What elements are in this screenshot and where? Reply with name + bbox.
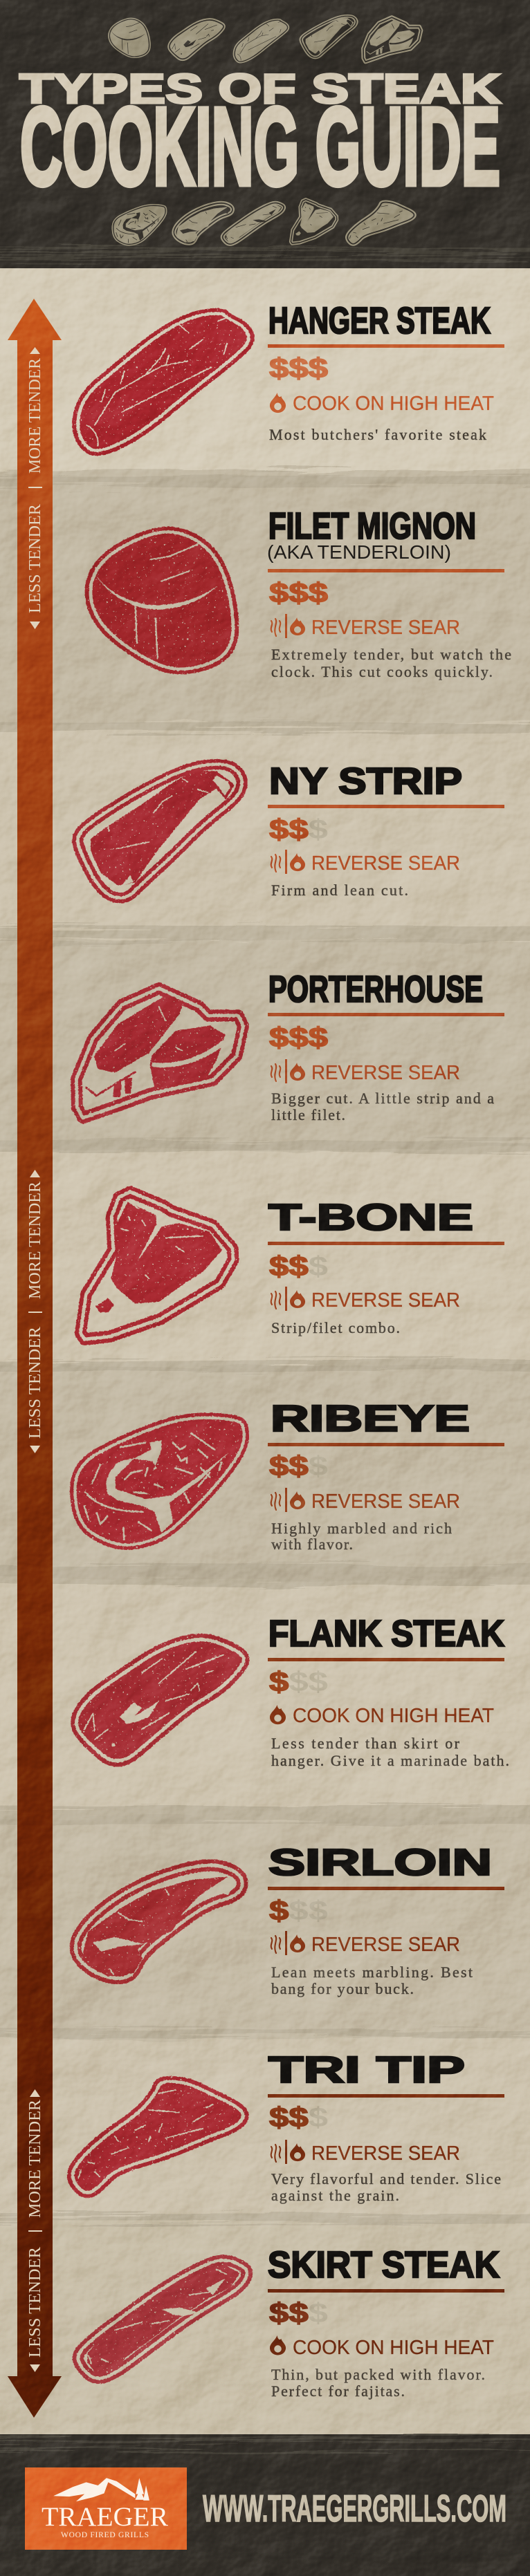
description — [271, 1090, 494, 1123]
description — [271, 1963, 473, 1997]
description: Lean meets marbling. Best — [271, 1963, 473, 1981]
description — [271, 2170, 501, 2204]
heading: NY STRIP — [269, 760, 462, 802]
description — [271, 646, 511, 680]
description: hanger. Give it a marinade bath. — [271, 1752, 509, 1769]
icon: flank steak — [77, 1640, 244, 1761]
divider rule — [268, 569, 504, 572]
text: tenderness labels, middle — [26, 1170, 44, 1453]
description — [271, 1735, 509, 1769]
description: bang for your buck. — [271, 1980, 414, 1997]
cooking method: REVERSE SEAR — [311, 852, 460, 875]
description — [271, 2366, 485, 2400]
price: $$$ — [269, 353, 328, 384]
icon: bottom row of small steaks — [113, 200, 414, 244]
description: Strip/filet combo. — [271, 1319, 400, 1336]
cooking method: REVERSE SEAR — [311, 617, 460, 639]
text: tenderness labels, middle: LESS TENDER — [26, 1327, 44, 1439]
icon: ny strip — [77, 765, 242, 898]
icon: hanger steak — [78, 313, 248, 451]
heading: T-BONE — [268, 1197, 473, 1238]
panel: flank steak — [77, 1613, 509, 1769]
icon: reverse sear — [271, 614, 305, 638]
divider rule — [268, 2289, 504, 2293]
icon: reverse sear — [271, 1059, 305, 1083]
icon: sirloin — [75, 1865, 242, 1979]
panel: hanger steak — [78, 300, 504, 451]
panel: sirloin — [75, 1842, 504, 1997]
icon: reverse sear — [271, 1488, 305, 1512]
price: $$ $ — [269, 1451, 328, 1482]
panel: tri tip — [73, 2049, 504, 2204]
panel: porterhouse — [76, 969, 504, 1123]
cooking method: REVERSE SEAR — [311, 1289, 460, 1312]
logo wordmark: TRAEGER — [42, 2502, 168, 2532]
price: $$$ — [269, 1667, 328, 1697]
description: Perfect for fajitas. — [271, 2382, 405, 2400]
icon: porterhouse — [76, 989, 244, 1118]
price: $$ $ — [269, 2298, 328, 2328]
icon: reverse sear — [271, 1931, 305, 1955]
heading: TRI TIP — [268, 2049, 465, 2091]
description: with flavor. — [271, 1536, 353, 1553]
panel: t-bone — [80, 1192, 504, 1339]
icon: reverse sear — [271, 1287, 305, 1311]
icon: mountains and trees — [53, 2478, 149, 2501]
description: Thin, but packed with flavor. — [271, 2366, 485, 2383]
description: Less tender than skirt or — [271, 1735, 460, 1752]
price: $$ $ — [269, 2102, 328, 2133]
text: tenderness labels, lower — [26, 2089, 44, 2372]
cooking method: REVERSE SEAR — [311, 2143, 460, 2165]
text: tenderness labels, upper: MORE TENDER — [26, 358, 44, 474]
divider rule — [268, 1013, 504, 1016]
text: tenderness labels, lower: LESS TENDER — [26, 2247, 44, 2358]
heading: FILET MIGNON — [268, 505, 476, 547]
cooking method: REVERSE SEAR — [311, 1934, 460, 1956]
icon: flame — [270, 2335, 286, 2355]
subheading: (AKA TENDERLOIN) — [267, 541, 451, 563]
arrow: tenderness scale — [8, 299, 62, 2418]
panel: ribeye — [75, 1398, 504, 1553]
panel: skirt steak — [78, 2244, 504, 2400]
logo tagline: WOOD FIRED GRILLS — [61, 2531, 149, 2539]
cooking method: REVERSE SEAR — [311, 1491, 460, 1513]
description: Bigger cut. A little strip and a — [271, 1090, 494, 1107]
title: types of steak: TYPES OF STEAK — [19, 66, 501, 112]
divider rule — [268, 805, 504, 808]
description: little filet. — [271, 1106, 345, 1123]
description — [271, 1520, 452, 1553]
divider rule — [268, 1887, 504, 1890]
cooking method: REVERSE SEAR — [311, 1062, 460, 1084]
divider rule — [268, 344, 504, 348]
cooking method: COOK ON HIGH HEAT — [293, 1705, 494, 1727]
icon: tri tip — [73, 2082, 243, 2192]
icon: ribeye — [75, 1418, 244, 1545]
header panel — [0, 0, 530, 268]
cooking method: COOK ON HIGH HEAT — [293, 2337, 494, 2359]
description: Firm and lean cut. — [271, 881, 408, 899]
divider rule — [268, 1242, 504, 1245]
heading: SIRLOIN — [268, 1842, 492, 1883]
text: tenderness labels, upper: LESS TENDER — [26, 504, 44, 613]
icon: reverse sear — [271, 2140, 305, 2164]
text: tenderness labels, middle: MORE TENDER — [26, 1182, 44, 1299]
icon: filet mignon — [91, 532, 233, 669]
icon: t-bone — [80, 1192, 233, 1339]
heading: RIBEYE — [271, 1398, 470, 1439]
price: $$ $ — [269, 814, 328, 845]
footer panel — [0, 2434, 530, 2576]
heading: FLANK STEAK — [268, 1613, 504, 1654]
price: $$$ — [269, 1896, 328, 1926]
icon: flame — [270, 1705, 286, 1724]
description: Very flavorful and tender. Slice — [271, 2170, 501, 2187]
heading: SKIRT STEAK — [268, 2244, 500, 2286]
description: clock. This cut cooks quickly. — [271, 663, 493, 680]
icon: skirt steak — [78, 2260, 247, 2378]
divider rule — [268, 2094, 504, 2098]
text: tenderness labels, upper — [26, 347, 44, 629]
text: tenderness labels, lower: MORE TENDER — [26, 2100, 44, 2218]
logo: traeger — [25, 2467, 187, 2550]
description: against the grain. — [271, 2187, 399, 2204]
price: $$$ — [269, 578, 328, 608]
icon: top row of small steaks — [109, 16, 421, 62]
divider rule — [268, 1443, 504, 1446]
price: $$$ — [269, 1023, 328, 1053]
panel: filet mignon — [91, 505, 511, 680]
cooking method: COOK ON HIGH HEAT — [293, 393, 494, 415]
description: Extremely tender, but watch the — [271, 646, 511, 663]
price: $$ $ — [269, 1251, 328, 1282]
icon: reverse sear — [271, 850, 305, 874]
icon: flame — [270, 393, 286, 413]
description: Highly marbled and rich — [271, 1520, 452, 1537]
description: Most butchers' favorite steak — [269, 426, 486, 443]
divider rule — [268, 1658, 504, 1661]
panel: ny strip — [77, 760, 504, 899]
